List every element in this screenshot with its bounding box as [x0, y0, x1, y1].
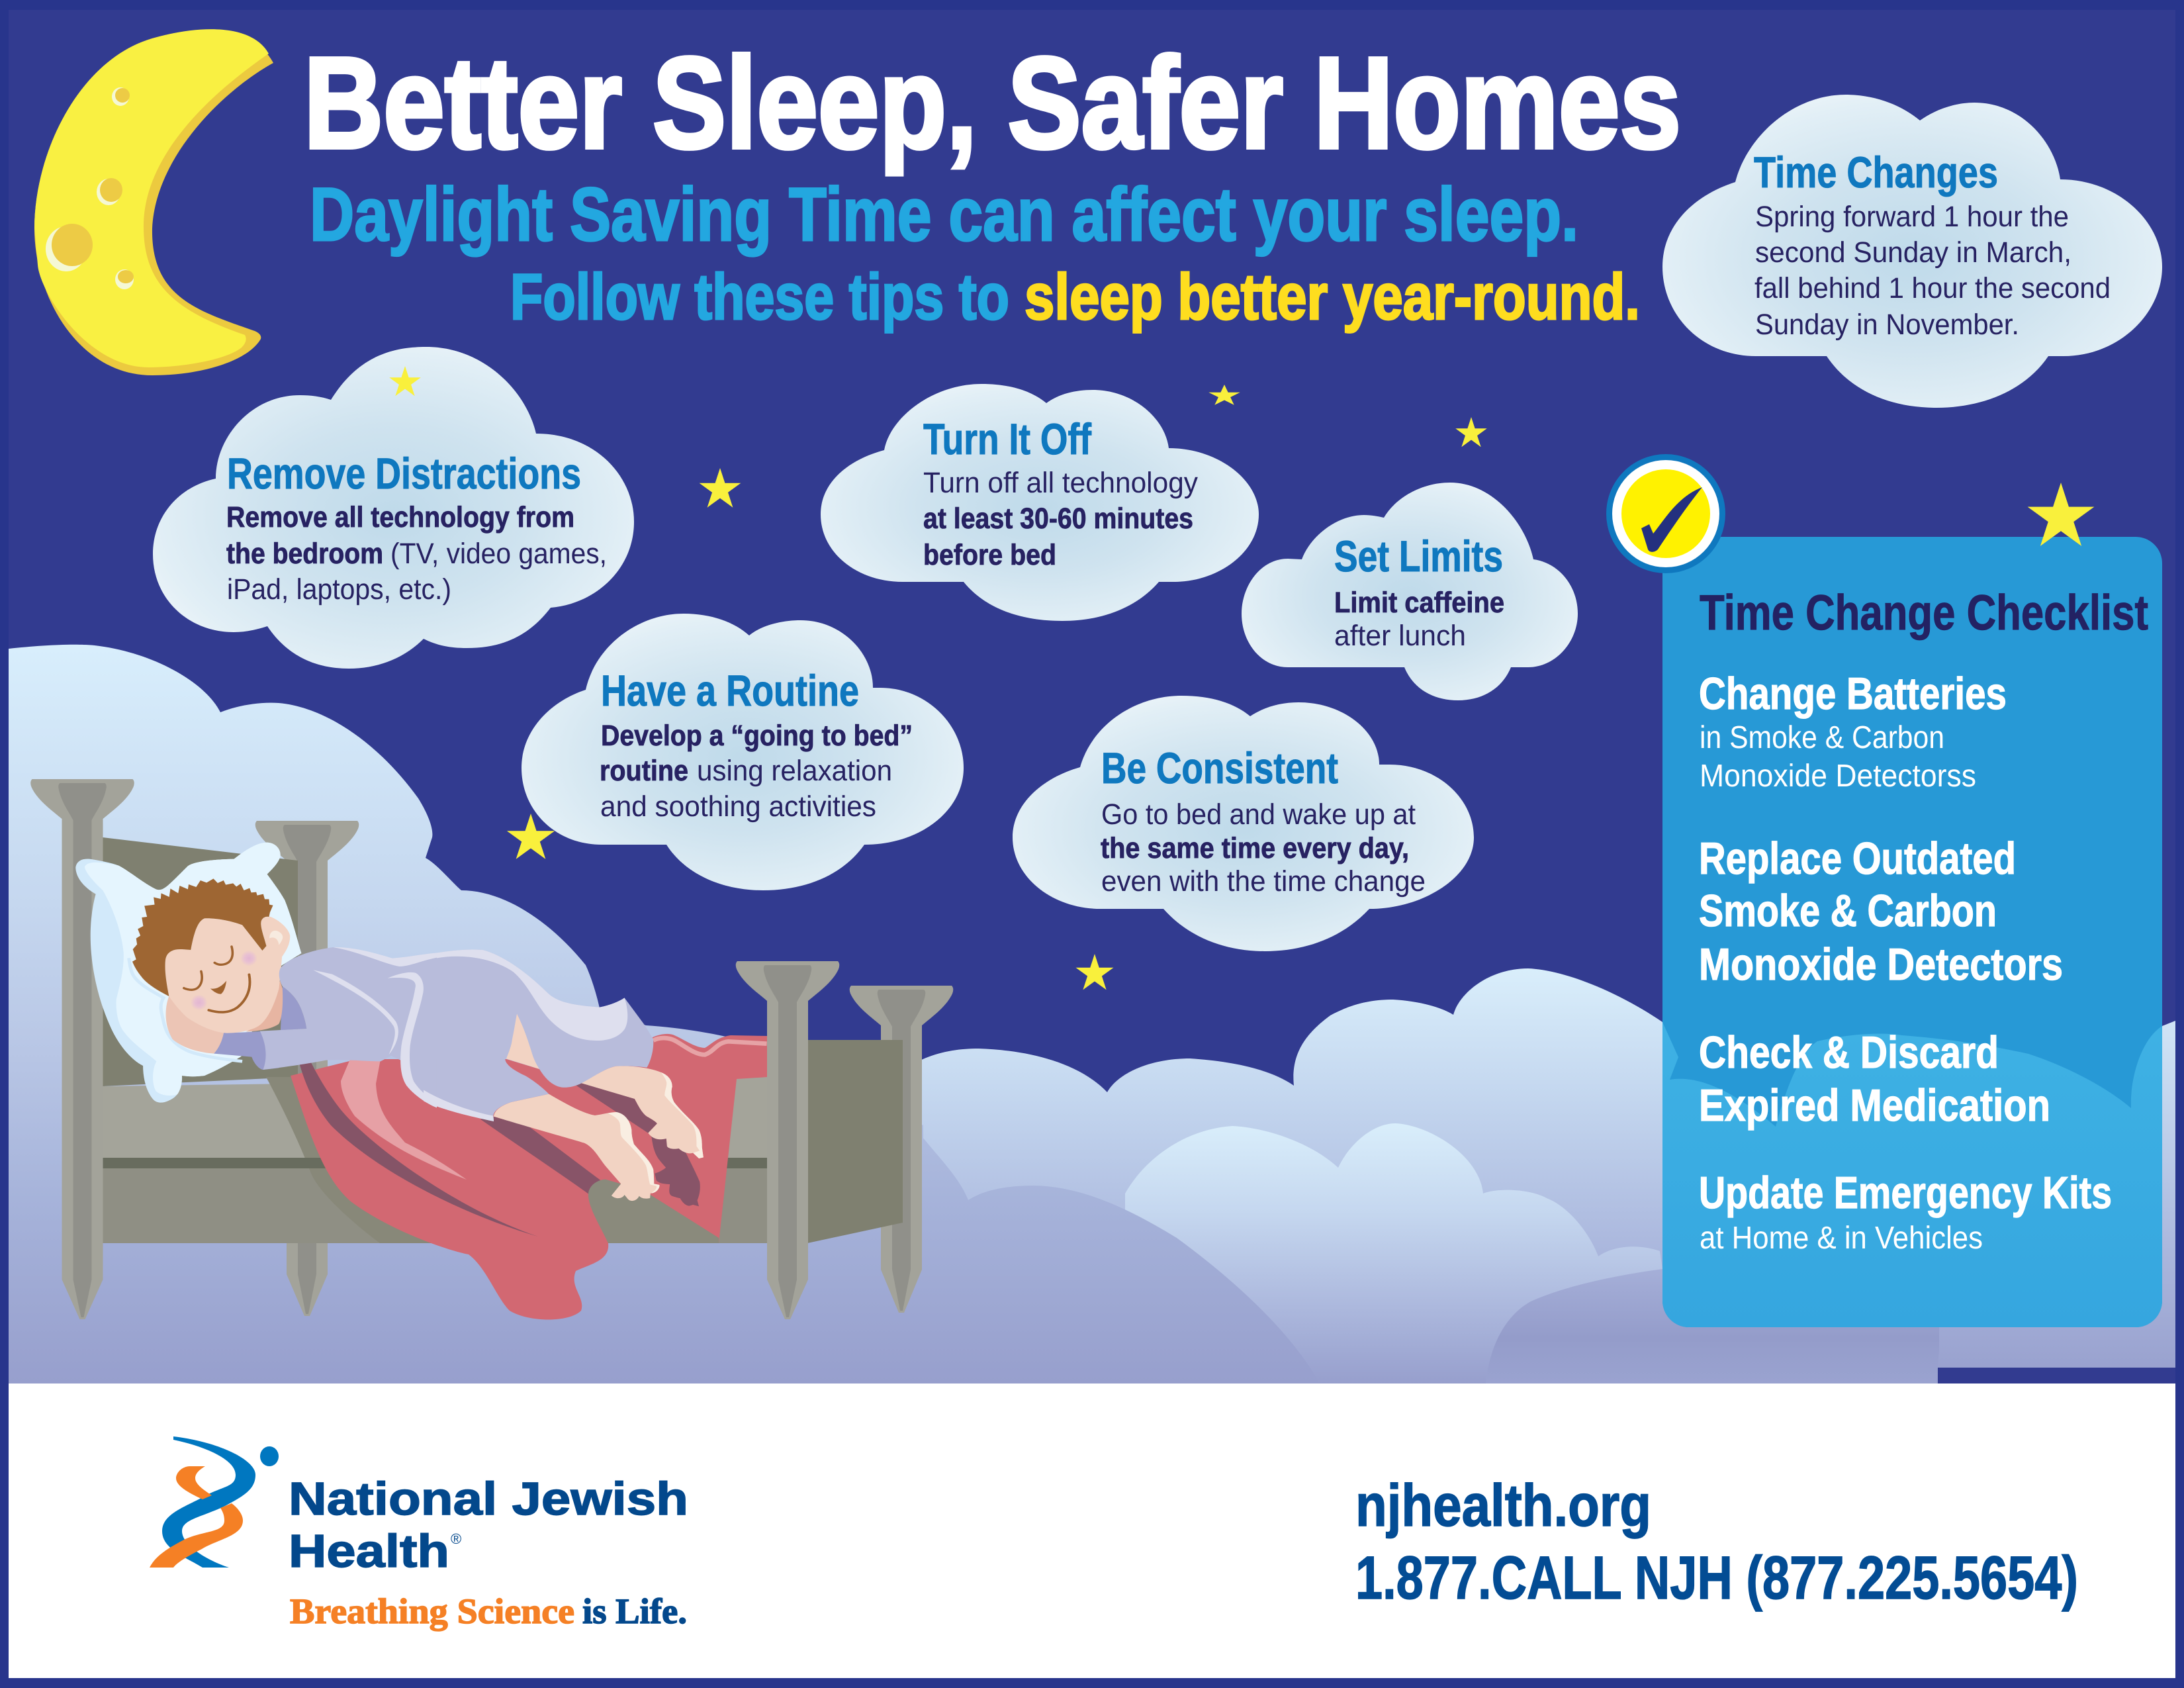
front left cloud	[913, 1125, 1320, 1383]
cloud: have a routine: using relaxation	[697, 755, 892, 787]
footer panel	[9, 1383, 2175, 1678]
cloud: have a routine: Develop a “going to bed”	[601, 720, 913, 752]
panel: time change checklist: Replace Outdated	[1699, 833, 2016, 884]
cloud: remove distractions: Remove all technology from	[226, 501, 574, 534]
cloud: set limits: after lunch	[1334, 620, 1466, 652]
illustration: child sleeping in bed	[30, 779, 953, 1320]
cloud: set limits: Limit caffeine	[1334, 586, 1504, 619]
crescent moon	[34, 29, 273, 375]
cloud: remove distractions	[153, 347, 634, 669]
cloud: have a routine	[522, 614, 964, 890]
logo: National Jewish Health: Breathing Science	[290, 1591, 574, 1631]
panel: time change checklist: Change Batteries	[1699, 669, 2007, 719]
icon: checklist star	[2028, 483, 2094, 546]
right background cloud bank	[920, 968, 2175, 1383]
contact details: njhealth.org	[1355, 1473, 1651, 1539]
logo: National Jewish Health	[150, 1436, 688, 1631]
panel: time change checklist: Expired Medication	[1699, 1080, 2050, 1131]
cloud: be consistent	[1013, 696, 1474, 951]
cloud: have a routine: Have a Routine	[601, 666, 859, 715]
logo: National Jewish Health: is Life.	[582, 1591, 687, 1631]
title: Better Sleep, Safer Homes	[304, 30, 1681, 175]
cloud: turn it off	[821, 384, 1259, 621]
cloud: have a routine: and soothing activities	[600, 790, 876, 823]
light front cloud	[1125, 1123, 1662, 1383]
dark band under checklist	[1938, 1368, 2175, 1383]
tagline: sleep better year-round.	[1024, 260, 1640, 333]
lower right cloud	[1486, 1269, 1939, 1383]
logo: National Jewish Health: Health	[289, 1525, 449, 1577]
cloud: turn it off: before bed	[923, 539, 1056, 571]
logo: National Jewish Health: ®	[451, 1530, 461, 1547]
cloud: be consistent: Go to bed and wake up at	[1101, 798, 1416, 831]
left background cloud	[9, 645, 923, 1383]
cloud: be consistent: even with the time change	[1101, 865, 1426, 898]
cloud: remove distractions: the bedroom	[226, 538, 383, 570]
cloud: remove distractions: iPad, laptops, etc.)	[227, 573, 451, 606]
cloud: set limits: Set Limits	[1334, 532, 1503, 581]
cloud: remove distractions: Remove Distractions	[227, 449, 581, 498]
panel: time change checklist: Monoxide Detectorss	[1700, 759, 1976, 794]
panel: time change checklist: Monoxide Detectors	[1699, 939, 2063, 990]
cloud: turn it off: Turn off all technology	[923, 467, 1198, 499]
cloud: time changes: Sunday in November.	[1755, 308, 2019, 341]
cloud: time changes: Time Changes	[1754, 148, 1998, 197]
cloud: time changes: fall behind 1 hour the second	[1754, 272, 2111, 305]
cloud: time changes: second Sunday in March,	[1755, 236, 2071, 269]
subtitle: Daylight Saving Time can affect your sleep.	[310, 173, 1578, 257]
stars	[389, 366, 1487, 990]
icon: check mark badge	[1606, 454, 1725, 573]
cloud: be consistent: Be Consistent	[1101, 743, 1338, 792]
panel: time change checklist: at Home & in Vehicles	[1700, 1221, 1983, 1256]
cloud: turn it off: Turn It Off	[923, 414, 1092, 463]
cloud: have a routine: routine	[600, 755, 688, 787]
tagline: Follow these tips to	[510, 260, 1009, 333]
logo: National Jewish Health: National Jewish	[289, 1473, 688, 1524]
cloud: turn it off: at least 30-60 minutes	[923, 502, 1193, 535]
cloud: remove distractions: (TV, video games,	[390, 538, 607, 570]
cloud: time changes: Spring forward 1 hour the	[1755, 201, 2069, 233]
panel: time change checklist	[1662, 537, 2162, 1331]
panel: time change checklist: Check & Discard	[1699, 1027, 1999, 1078]
panel: time change checklist: Smoke & Carbon	[1699, 886, 1997, 936]
contact details	[1355, 1473, 2078, 1612]
cloud: set limits	[1242, 483, 1578, 700]
tagline	[510, 260, 1640, 333]
cloud: time changes	[1662, 95, 2162, 408]
panel: time change checklist: in Smoke & Carbon	[1700, 720, 1944, 755]
cloud: be consistent: the same time every day,	[1101, 832, 1409, 865]
